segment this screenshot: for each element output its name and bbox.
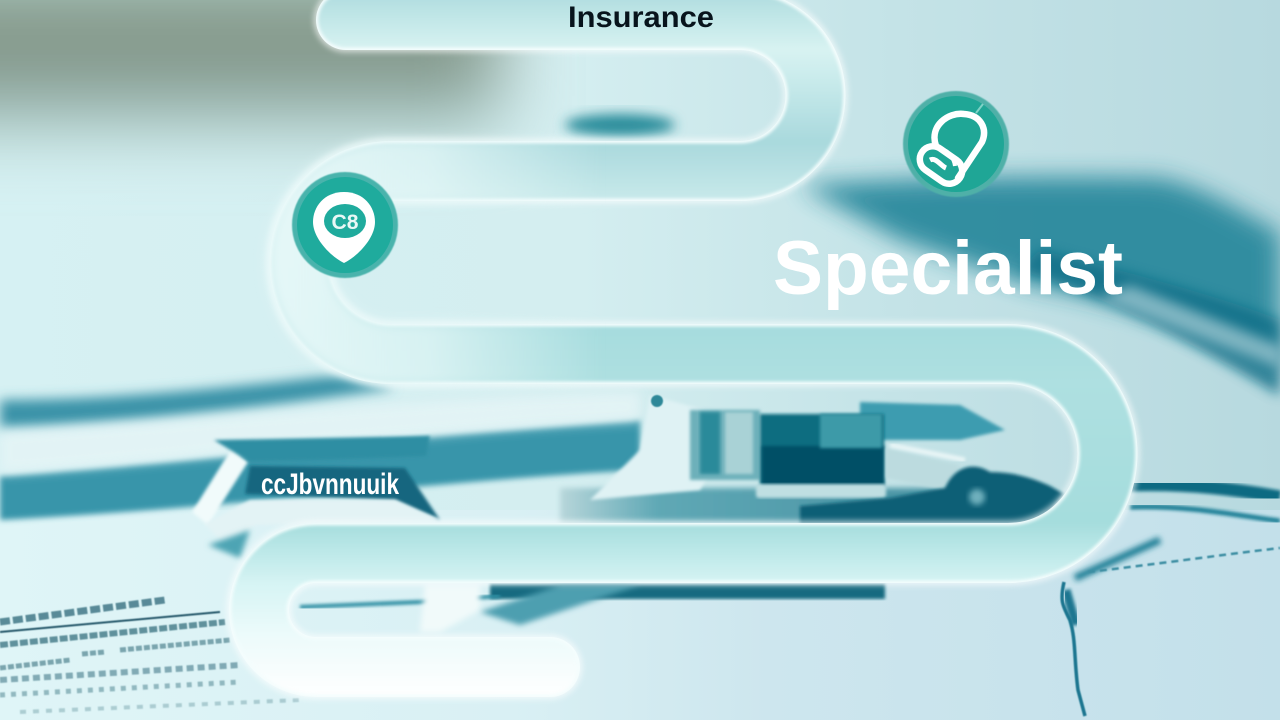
blurred horizontal strokes left: [0, 374, 395, 428]
upper right teal blurred shape: [800, 177, 1280, 372]
clip device behind the small label: [192, 448, 248, 525]
document details inside the lower hole: [300, 596, 500, 607]
winding ribbon path: [259, 20, 1108, 667]
ribbon teal body: [259, 20, 1108, 667]
title: Insurance: Insurance: [568, 1, 714, 34]
ribbon left turn wash: [300, 171, 640, 354]
stethoscope head device: [560, 488, 1050, 524]
ribbon outer glow: [259, 20, 1108, 667]
dark olive blur top left: [0, 0, 500, 130]
garbled small label: ccJbvnnuuik: [261, 468, 399, 501]
printed document text left: [0, 600, 300, 712]
stethoscope tube right: [1130, 485, 1280, 497]
icon: stethoscope badge: [903, 91, 1009, 197]
ribbon body edge: [259, 20, 1108, 667]
pin label: C8: [332, 211, 359, 234]
dark rule under ribbon: [490, 584, 885, 599]
icon: location pin: [292, 172, 398, 278]
blurred band continuing behind stethoscope head: [860, 402, 1005, 440]
heading: Specialist: Specialist: [773, 226, 1123, 311]
teal blur patch behind second band: [565, 114, 675, 136]
